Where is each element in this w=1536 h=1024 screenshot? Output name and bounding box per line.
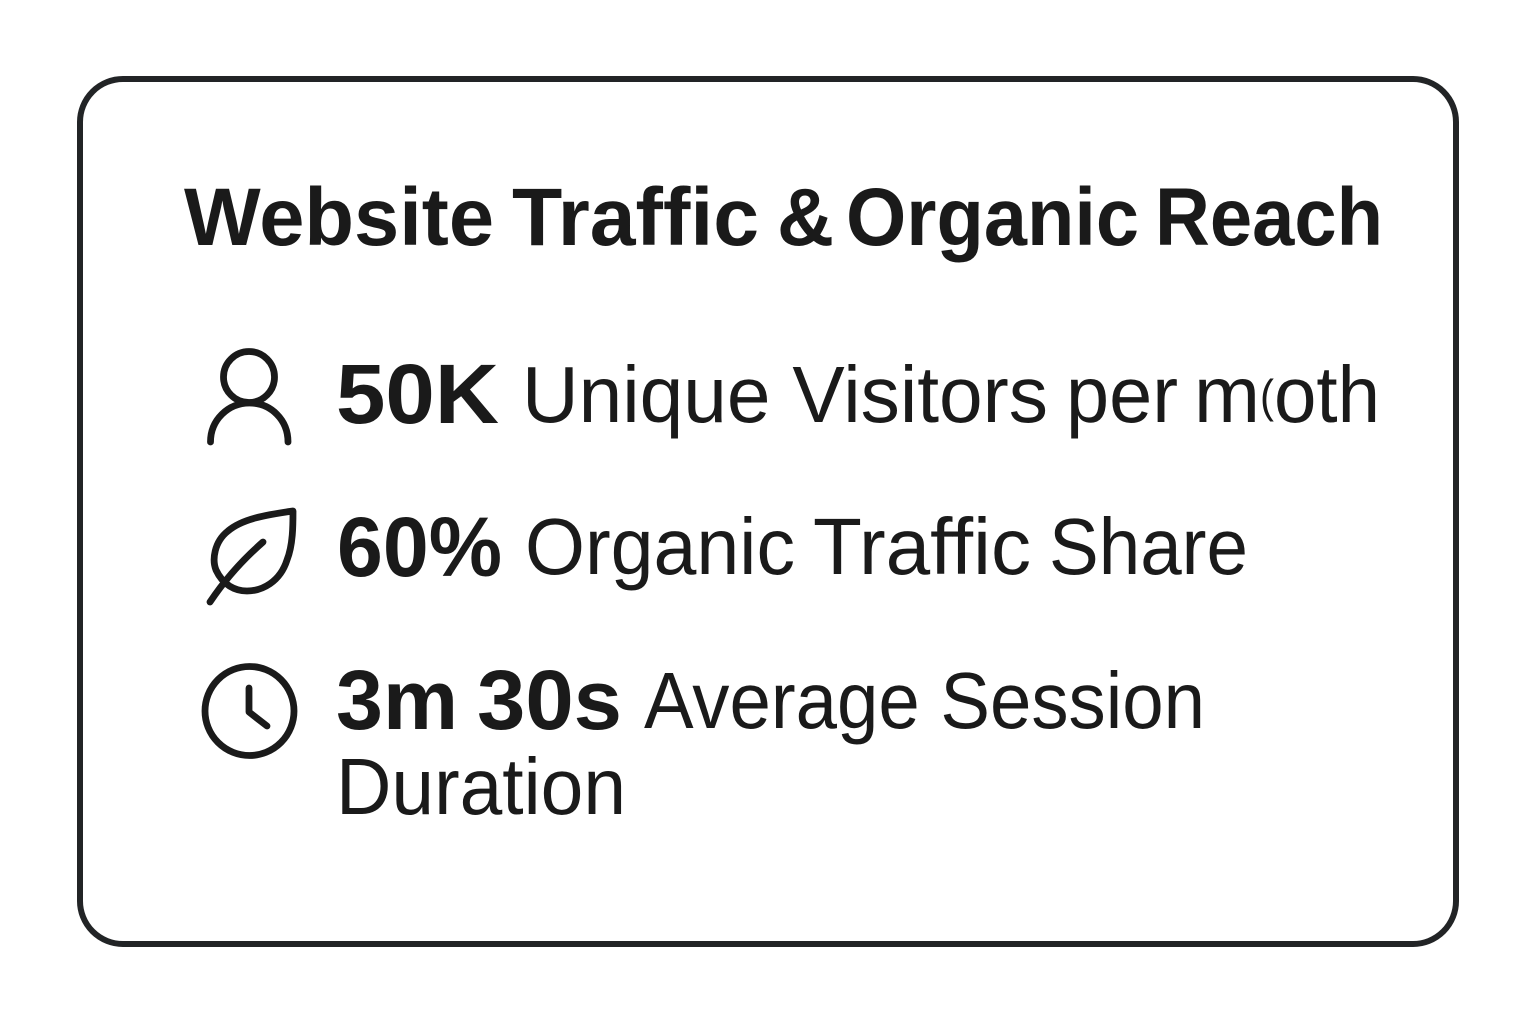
stat: average session duration: 3m (336, 653, 458, 747)
panel: card (80, 79, 1456, 944)
title: Website (184, 172, 494, 263)
stat: organic traffic share (337, 500, 1248, 594)
stat: average session duration: 30s (477, 653, 622, 747)
stat: organic traffic share: 60% (337, 500, 502, 594)
stat: average session duration: Duration (336, 742, 626, 831)
stat: average session duration (336, 653, 1205, 831)
stat: organic traffic share: Share (1049, 502, 1248, 591)
stat: unique visitors: m (1194, 350, 1260, 439)
stat: unique visitors: oth (1274, 350, 1380, 439)
stat: unique visitors: Unique Visitors (522, 350, 1048, 439)
stat: unique visitors: ( (1260, 370, 1275, 422)
icon: clock (205, 666, 294, 756)
title: Traffic (512, 172, 759, 263)
title: & (777, 172, 834, 263)
title: Reach (1155, 172, 1383, 263)
title (184, 172, 1383, 263)
stat: average session duration: Average Session (644, 656, 1205, 745)
stat: unique visitors: per (1066, 350, 1178, 439)
icon: person (210, 352, 288, 442)
title: Organic (846, 172, 1139, 263)
stat: organic traffic share: Organic (525, 502, 795, 591)
stat: organic traffic share: Traffic (813, 502, 1031, 591)
icon: leaf (210, 511, 293, 602)
stat: unique visitors (336, 347, 1380, 441)
stat: unique visitors: 50K (336, 347, 499, 441)
